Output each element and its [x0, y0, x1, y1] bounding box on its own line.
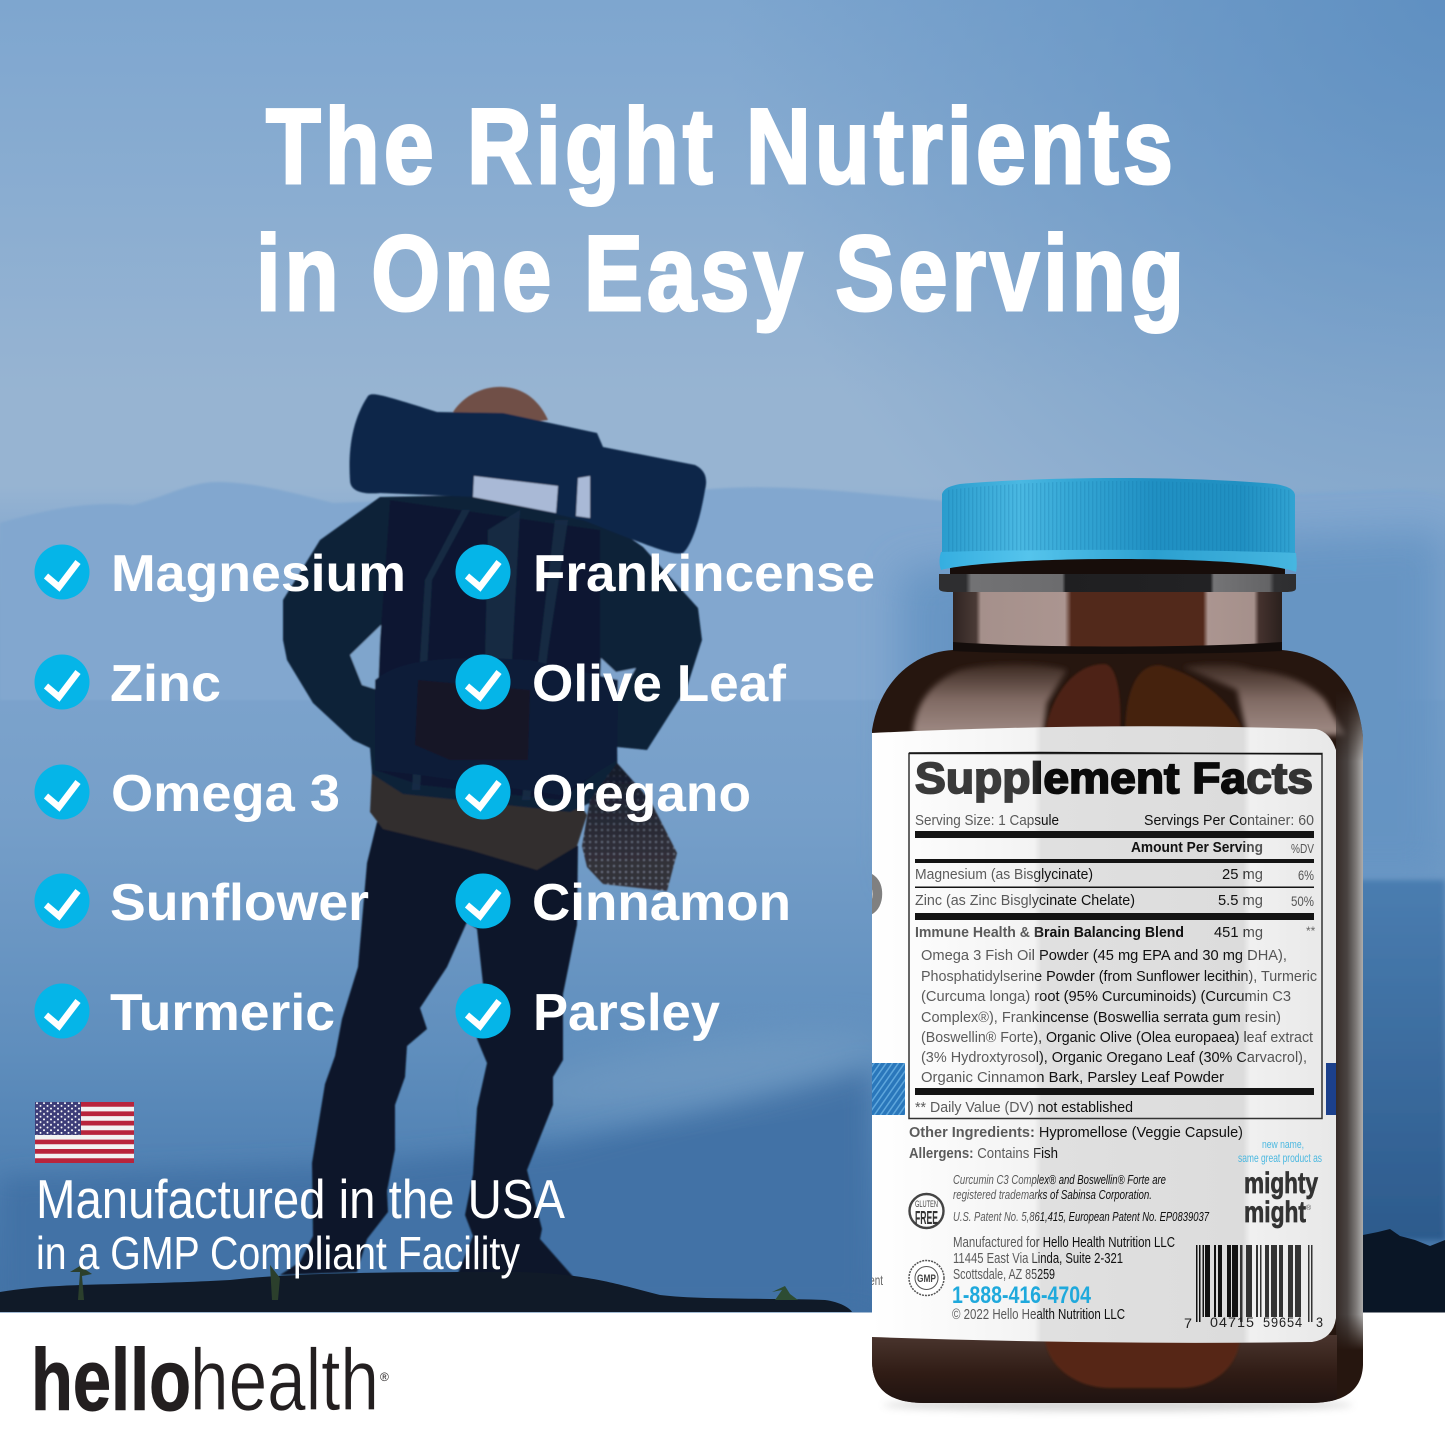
hiker silhouette with backpack: [280, 387, 706, 1281]
barcode: 59654: [1263, 1314, 1303, 1330]
item: Sunflower: Sunflower: [110, 874, 369, 932]
bottle shadow: [883, 1399, 1353, 1411]
head and hat: [453, 387, 548, 425]
row: blend: 451 mg: [1214, 925, 1263, 941]
waist band: [370, 770, 587, 870]
glass body: [872, 650, 1363, 1403]
item: Oregano: Oregano: [532, 765, 751, 823]
ingredient list: Omega 3 Fish Oil Powder (45 mg EPA and 30 mg DHA),: [921, 947, 1287, 964]
text: manufactured in the USA: in a GMP Compliant Facility: [36, 1227, 520, 1279]
ingredient list: Phosphatidylserine Powder (from Sunflower lecithin), Turmeric: [921, 968, 1317, 985]
trademark and patent notes: registered trademarks of Sabinsa Corporation.: [953, 1188, 1152, 1202]
row: zinc: 50%: [1291, 893, 1314, 909]
item: Omega 3: Omega 3: [111, 765, 340, 823]
item: Zinc: Zinc: [110, 655, 221, 713]
rolled sleeping mat: [350, 394, 706, 554]
manufacturer address: Scottsdale, AZ 85259: [953, 1267, 1055, 1283]
note: new name: same great product as: [1238, 1151, 1322, 1165]
title: The Right Nutrients: [266, 86, 1177, 206]
row: magnesium: Magnesium (as Bisglycinate): [915, 867, 1093, 883]
row: blend: **: [1306, 924, 1316, 938]
dark gap below cap: [950, 555, 1285, 577]
item: Parsley: Parsley: [533, 984, 720, 1042]
text: manufactured in the USA: [36, 1168, 565, 1279]
other ingredients and allergens: Other Ingredients: Hypromellose (Veggie Capsule): [909, 1125, 1243, 1141]
barcode: 04715: [1210, 1314, 1255, 1330]
item: Frankincense: Frankincense: [533, 545, 875, 603]
ingredient checklist: left column: [34, 544, 406, 1042]
footnote: ** Daily Value (DV) not established: [915, 1100, 1133, 1116]
manufacturer address: © 2022 Hello Health Nutrition LLC: [952, 1307, 1125, 1323]
logo: hellohealth: hello: [31, 1332, 191, 1429]
item: Olive Leaf: Olive Leaf: [532, 655, 787, 713]
rules: [915, 831, 1314, 1095]
capsules inside: [1045, 664, 1120, 735]
badge: GMP certified: GMP: [917, 1273, 936, 1285]
icon: US flag: [35, 1102, 134, 1163]
note: new name: [1238, 1139, 1322, 1165]
item: Turmeric: Turmeric: [110, 984, 335, 1042]
manufacturer address: [952, 1235, 1175, 1323]
serving info: Servings Per Container: 60: [1144, 813, 1314, 829]
supplement bottle: [834, 478, 1366, 1411]
logo: mighty might: might: [1244, 1196, 1306, 1229]
label side graphics: O: [834, 857, 885, 931]
bottle neck: [953, 585, 1282, 650]
item: Zinc: [34, 654, 221, 713]
pack centre: [375, 500, 600, 800]
arm gaps: [350, 622, 386, 690]
logo: mighty might: [1244, 1167, 1318, 1229]
supplement facts panel: [909, 752, 1322, 1118]
badge: gluten free: FREE: [915, 1208, 938, 1228]
barcode: 7: [1184, 1315, 1192, 1331]
item: Cinnamon: Cinnamon: [532, 874, 791, 932]
mesh hat on pack: [582, 763, 677, 891]
ground ridge: [0, 1265, 852, 1312]
logo: mighty might: mighty: [1244, 1167, 1318, 1200]
row: blend: Immune Health & Brain Balancing Blend: [915, 925, 1184, 941]
badge: gluten free: GLUTEN: [915, 1199, 938, 1210]
trademark and patent notes: U.S. Patent No. 5,861,415, European Patent No. EP0839037: [953, 1210, 1210, 1224]
heading: Supplement Facts: Supplement Facts: [915, 754, 1313, 803]
ingredient list: (Boswellin® Forte), Organic Olive (Olea europaea) leaf extract: [921, 1029, 1314, 1046]
manufacturer address: Manufactured for Hello Health Nutrition LLC: [953, 1235, 1175, 1251]
other ingredients and allergens: [909, 1125, 1243, 1162]
note: new name: new name,: [1262, 1139, 1304, 1151]
badge: GMP certified: [909, 1260, 944, 1296]
label side graphics: [872, 874, 1336, 1285]
row: zinc: Zinc (as Zinc Bisglycinate Chelate): [915, 893, 1135, 909]
glass details: [872, 664, 1366, 1405]
manufacturer address: 1-888-416-4704: [952, 1282, 1092, 1309]
serving info: Serving Size: 1 Capsule: [915, 813, 1059, 829]
pack lower pocket: [375, 658, 618, 795]
ingredient list: (3% Hydroxtyrosol), Organic Oregano Leaf (30% Carvacrol),: [921, 1049, 1307, 1066]
logo: hellohealth: [31, 1332, 389, 1429]
white label: [872, 726, 1336, 1343]
jacket and pack: [283, 495, 702, 812]
text: manufactured in the USA: Manufactured in the USA: [36, 1168, 565, 1230]
trademark and patent notes: Curcumin C3 Complex® and Boswellin® Forte are: [953, 1173, 1166, 1187]
trademark and patent notes: [953, 1173, 1210, 1224]
ingredient list: (Curcuma longa) root (95% Curcuminoids) (Curcumin C3: [921, 988, 1291, 1005]
row: blend: [915, 924, 1316, 941]
ingredient checklist: right column: [456, 544, 875, 1042]
right shoulder highlight: [1183, 664, 1345, 735]
manufacturer address: 11445 East Via Linda, Suite 2-321: [953, 1251, 1123, 1267]
badge: gluten free: [910, 1194, 944, 1228]
legs: [280, 822, 578, 1281]
ingredient list: [921, 947, 1317, 1086]
label side graphics: ment: [861, 1272, 883, 1288]
pack straps: [412, 510, 568, 800]
barcode: [1184, 1245, 1323, 1331]
collar ring: [939, 574, 1296, 592]
row: zinc: [915, 893, 1314, 909]
logo: hellohealth: ®: [380, 1370, 389, 1384]
left shoulder highlight: [913, 664, 1067, 735]
row: zinc: 5.5 mg: [1218, 893, 1263, 909]
ingredient list: Complex®), Frankincense (Boswellia serrata gum resin): [921, 1009, 1281, 1026]
barcode: 3: [1316, 1314, 1323, 1330]
title: [256, 86, 1188, 333]
logo: mighty might: ®: [1306, 1204, 1312, 1212]
row: magnesium: 25 mg: [1222, 867, 1263, 883]
white footer band: [0, 1312, 1445, 1445]
item: Magnesium: Magnesium: [111, 545, 406, 603]
table header: %DV: [1291, 842, 1315, 856]
ingredient list: Organic Cinnamon Bark, Parsley Leaf Powder: [921, 1069, 1224, 1086]
logo: hellohealth: health: [190, 1332, 379, 1429]
serving info: [915, 813, 1314, 829]
row: magnesium: 6%: [1298, 867, 1314, 883]
white strap detail: [473, 476, 558, 513]
title: in One Easy Serving: [256, 213, 1188, 333]
table header: Amount Per Serving: [1131, 840, 1263, 856]
neck shadow ring: [953, 642, 1282, 654]
row: magnesium: [915, 867, 1314, 883]
other ingredients and allergens: Allergens: Contains Fish: [909, 1146, 1058, 1162]
item: Parsley: [456, 984, 720, 1042]
blue cap: [940, 478, 1297, 572]
plants: [70, 1265, 280, 1300]
